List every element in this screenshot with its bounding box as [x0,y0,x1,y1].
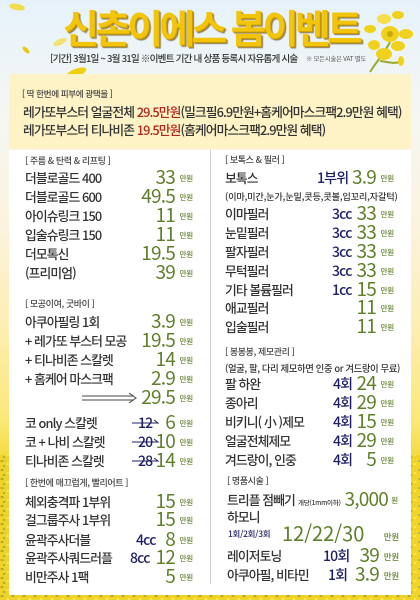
price row: 만원 [180,497,193,508]
discounted row: 티나비존 스칼렛 [25,451,104,470]
price row: 만원 [381,455,394,466]
price row: triple: 원 [391,495,398,506]
price row: 15 [156,487,175,514]
price row: 29 [356,426,376,453]
price row: 3.9 [151,307,175,334]
price row: 만원 [381,417,394,428]
price row: 더블로골드 400 [25,168,101,187]
heading: body slim: [ 한번에 매끄럽게, 빨리어트 ] [25,476,128,489]
price row: 만원 [381,303,394,314]
price row: 입술필러 [225,317,268,336]
price row: 1회 [328,565,347,585]
price row: 만원 [381,228,394,239]
discounted row: 12 [138,413,152,433]
price row: 아쿠아필, 비타민 [227,565,309,584]
price row: 만원 [384,551,399,563]
price row: 14 [156,345,175,372]
price row [25,239,193,266]
price row: 만원 [381,173,394,184]
price row: 애교필러 [225,298,268,317]
price row: 만원 [180,192,193,203]
price row: 입술슈링크 150 [25,225,101,244]
price row: 4회 [333,412,352,432]
price row: 더블로골드 600 [25,187,101,206]
price row: 만원 [381,209,394,220]
panel: left price list [9,150,210,595]
panel: right price list [210,150,411,595]
price row: 19.5 [141,326,175,353]
offer line 1: 레가또부스터 얼굴전체 29.5만원(밀크필6.9만원+홈케어마스크팩2.9만원 혜택) [23,102,401,121]
offer line 2: 레가또부스터 티나비존 19.5만원(홈케어마스크팩2.9만원 혜택) [23,120,325,139]
price row: (프리미엄) [25,263,76,282]
price row: 33 [356,256,376,283]
total row with double arrow: 만원 [180,393,193,404]
price row: 기타 볼륨필러 [225,280,293,299]
discounted row: 14 [156,446,175,473]
price row: 만원 [180,515,193,526]
price row: 겨드랑이, 인중 [225,450,296,469]
price row: 5 [366,445,376,472]
discounted row: 만원 [180,418,193,429]
price row [225,275,394,302]
harmony prices: 12/22/30 [282,518,364,547]
price row: 33 [356,218,376,245]
price row: 19.5 [141,239,175,266]
price row: 만원 [381,379,394,390]
price row: 눈밑필러 [225,223,268,242]
discounted row: 만원 [180,437,193,448]
price row: 3.9 [355,560,379,587]
VAT note: ※ 모든시술은 VAT 별도 [306,54,366,63]
price row: 종아리 [225,393,258,412]
price row: 4회 [333,450,352,470]
botox areas note: (이마,미간,눈가,눈밑,콧등,콧볼,입꼬리,자갈턱) [225,189,398,203]
price row [25,258,193,285]
price row [25,307,193,334]
price row [25,201,193,228]
price row: 윤곽주사더블 [25,530,90,549]
discounted row: 10 [156,427,175,454]
price row [25,364,193,391]
total row with double arrow [82,383,193,410]
price row: 15 [356,275,376,302]
price row: 더모톡신 [25,244,68,263]
harmony name: 하모니 [227,507,260,526]
price row: 무턱필러 [225,261,268,280]
price row [225,293,394,320]
icon: canola flower [364,11,413,72]
price row: 11 [356,293,376,320]
price row: 24 [356,369,376,396]
harmony prices: 만원 [384,531,399,543]
heading: pores: [ 모공이여, 굿바이 ] [25,297,94,310]
price row [225,199,394,226]
price row: 팔자필러 [225,242,268,261]
price row [25,505,193,532]
price row: 만원 [381,398,394,409]
price row: 39 [156,258,175,285]
heading: botox and filler: [ 보톡스 & 필러 ] [225,153,284,166]
price row: 15 [356,407,376,434]
price row: 3cc [332,204,352,224]
price row [225,218,394,245]
price row [225,312,394,339]
discounted row: 코 + 나비 스칼렛 [25,432,105,451]
price row: 3cc [332,242,352,262]
discounted row: 만원 [180,456,193,467]
price row: 29 [356,388,376,415]
price row [225,388,394,415]
price row [225,407,394,434]
hair removal note: (얼굴, 팔, 다리 제모하면 인중 or 겨드랑이 무료) [225,361,400,375]
price row: 체외충격파 1부위 [25,492,110,511]
discounted row [25,446,193,473]
price row [25,326,193,353]
price row: 아쿠아필링 1회 [25,312,99,331]
price row [225,445,394,472]
price row: 만원 [384,570,399,582]
price row: 얼굴전체제모 [225,431,290,450]
price row: triple: 3,000 [345,485,388,512]
price row: 아이슈링크 150 [25,206,101,225]
price row: 비만주사 1팩 [25,567,88,586]
discounted row: 28 [138,451,152,471]
price row: 만원 [180,173,193,184]
price row: 만원 [381,322,394,333]
price row: 8cc [130,548,150,568]
price row: 8 [165,525,175,552]
heading: hair removal: [ 봉봉봉, 제모관리 ] [225,345,294,358]
harmony prices: 1회/2회/3회 [228,528,270,540]
price row [25,543,193,570]
price row: triple: 개당(1mm이하) [298,497,341,507]
price row: 만원 [180,230,193,241]
price row: 3cc [332,223,352,243]
harmony prices [228,518,399,547]
price row: 4cc [136,530,156,550]
discounted row [25,427,193,454]
panel: one-time skin glow offer [9,74,411,149]
discounted row [25,408,193,435]
price row: 1부위 [317,168,348,188]
price row: 11 [356,312,376,339]
price row: 3cc [332,261,352,281]
price row: triple: 트리플 점빼기 [227,490,295,509]
discounted row: 6 [165,408,175,435]
price row: 만원 [381,285,394,296]
total row with double arrow: 29.5 [141,383,175,410]
icon: falling yellow petals [9,4,86,74]
price row: 3.9 [352,163,376,190]
heading: wrinkle: [ 주름 & 탄력 & 리프팅 ] [25,154,110,167]
price row: 33 [356,199,376,226]
price row: 만원 [180,535,193,546]
price row: 39 [360,541,379,568]
price row: + 홈케어 마스크팩 [25,369,113,388]
price row [25,562,193,589]
price row: 보톡스 [225,168,258,187]
price row: 15 [156,505,175,532]
price row: 2.9 [151,364,175,391]
price row: 4회 [333,393,352,413]
price row: 33 [356,237,376,264]
price row: 만원 [180,572,193,583]
price row: 만원 [381,436,394,447]
discounted row: 코 only 스칼렛 [25,413,97,432]
price row: 만원 [180,211,193,222]
price row: 10회 [323,546,349,566]
price row: 만원 [180,317,193,328]
price row: 팔 하완 [225,374,260,393]
price row [225,237,394,264]
heading: premium: [ 명품시술 ] [227,474,268,487]
price row: 만원 [381,266,394,277]
price row: 윤곽주사쿼드러플 [25,548,112,567]
price row: 만원 [381,247,394,258]
price row: 만원 [180,336,193,347]
price row: 만원 [180,249,193,260]
price row: + 레가또 부스터 모공 [25,331,126,350]
price row: 만원 [180,374,193,385]
price row: triple [227,485,398,512]
price row [25,487,193,514]
price row [25,182,193,209]
price row: 걸그룹주사 1부위 [25,510,110,529]
price row [25,163,193,190]
title: 신촌이에스 봄이벤트 [63,0,359,55]
price row: 만원 [180,355,193,366]
price row: 레이저토닝 [227,546,281,565]
price row [225,163,394,190]
price row [225,369,394,396]
price row: 비키니( 小 )제모 [225,412,304,431]
discounted row: 20 [138,432,152,452]
price row [227,541,399,568]
price row: 1cc [332,280,352,300]
price row: 4회 [333,374,352,394]
price row: 만원 [180,268,193,279]
price row [225,256,394,283]
price row: 11 [156,220,175,247]
price row: 33 [156,163,175,190]
price row: 4회 [333,431,352,451]
price row: 이마필러 [225,204,268,223]
price row: 11 [156,201,175,228]
price row [25,525,193,552]
price row: 12 [156,543,175,570]
price row [225,426,394,453]
price row: 5 [165,562,175,589]
price row: + 티나비존 스칼렛 [25,350,113,369]
price row: 49.5 [141,182,175,209]
price row [25,345,193,372]
event period line: [기간] 3월1일 ~ 3월 31일 ※이벤트 기간 내 상품 등록시 자유롭게 시술 [50,51,297,65]
price row [25,220,193,247]
offer heading: [ 딱 한번에 피부에 광택을 ] [22,88,112,100]
price row: 만원 [180,553,193,564]
price row [227,560,399,587]
